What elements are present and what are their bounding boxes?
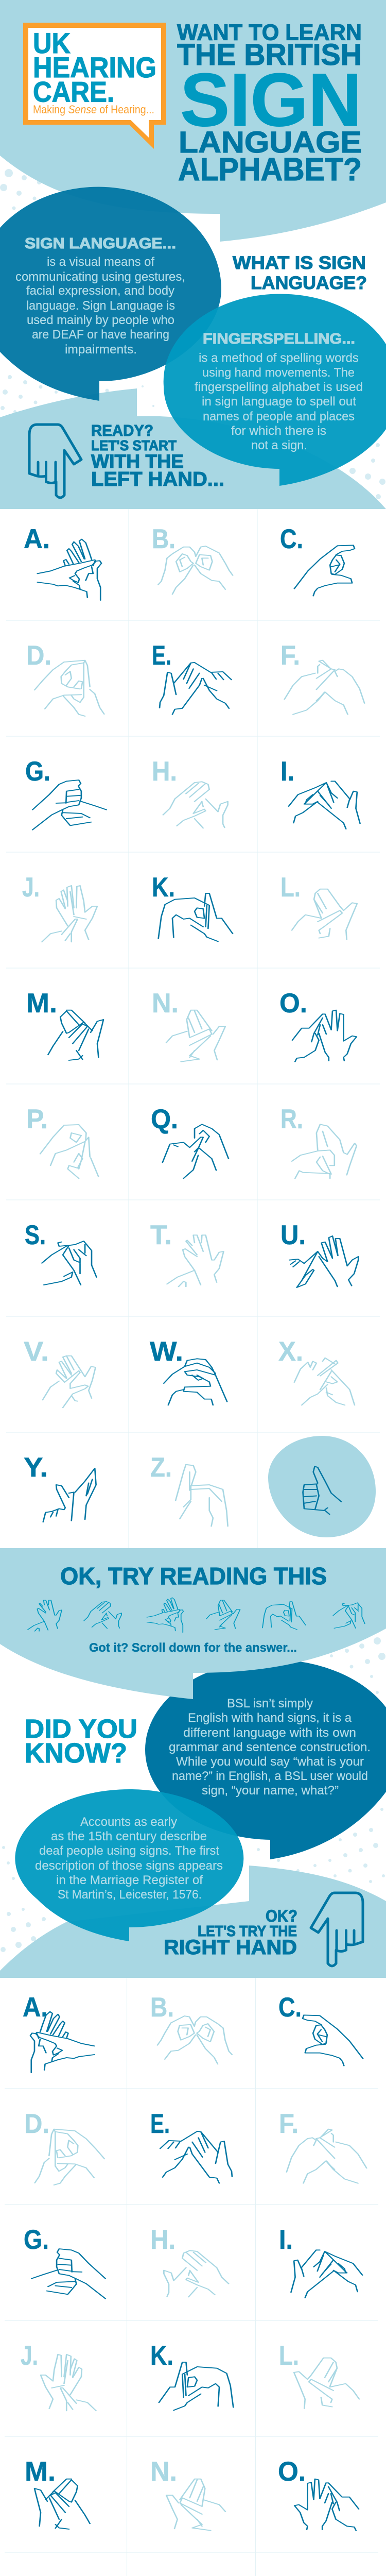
- dark bubble: BSL isn't simply: grammar and sentence construction.: [169, 1740, 371, 1754]
- left cell B: [152, 524, 233, 594]
- right cell A: A.: [23, 1992, 48, 2023]
- left cell Z: [150, 1452, 228, 1526]
- right cell B: B.: [150, 1992, 174, 2023]
- right cell N: N.: [150, 2456, 177, 2487]
- bubble: accounts: in the Marriage Register of: [56, 1873, 203, 1887]
- right cell D: D.: [24, 2109, 49, 2139]
- dark bubble: BSL isn't simply: [145, 1659, 386, 1859]
- heading: ok try reading this: OK, TRY READING THIS: [60, 1563, 327, 1589]
- heading: did you know: [25, 1714, 137, 1769]
- left cell V: [24, 1336, 96, 1408]
- left cell U: U.: [280, 1220, 306, 1250]
- logo: UK Hearing Care: UK: [33, 27, 71, 59]
- dark bubble: BSL isn't simply: English with hand signs, it is a: [188, 1711, 352, 1725]
- bubble: accounts: Accounts as early: [80, 1815, 177, 1829]
- left cell J: [22, 872, 97, 942]
- left cell D: [26, 640, 104, 716]
- logo: UK Hearing Care: [23, 23, 166, 149]
- left cell P: [26, 1104, 98, 1178]
- dark bubble: BSL isn't simply: While you would say “what is your: [176, 1755, 364, 1769]
- icon: H: [84, 1602, 121, 1629]
- title: WANT TO LEARN: [177, 20, 362, 45]
- title: THE BRITISH: [177, 38, 362, 72]
- title: ALPHABET?: [178, 152, 362, 188]
- left cell G: G.: [25, 756, 50, 787]
- left cell R: [280, 1104, 357, 1178]
- right cell K: K.: [150, 2341, 173, 2371]
- right cell N: [150, 2456, 225, 2531]
- text: ready: READY?: [91, 421, 153, 439]
- left cell Y: [24, 1452, 96, 1522]
- left thumbs up: [268, 1436, 376, 1537]
- left cell C: C.: [280, 524, 303, 554]
- left cell T: T.: [150, 1220, 172, 1250]
- bubble: fingerspelling: [164, 294, 386, 486]
- bubble: accounts: description of those signs appears: [35, 1859, 223, 1873]
- left cell D: D.: [26, 640, 51, 671]
- header bubble: [0, 0, 386, 242]
- right cell L: [279, 2341, 359, 2409]
- text: ok try the right hand: [164, 1907, 297, 1959]
- left cell I: [280, 756, 360, 829]
- text: ready: LET'S START: [91, 437, 177, 453]
- right cell F: F.: [279, 2109, 299, 2139]
- bubble: sign language: communicating using gestures,: [15, 270, 185, 284]
- left cell M: [26, 988, 103, 1060]
- left cell Q: [151, 1104, 229, 1178]
- right cell D: [24, 2109, 104, 2185]
- left cell F: [280, 640, 364, 715]
- heading: what is sign language: LANGUAGE?: [251, 273, 367, 293]
- text: ready: [91, 421, 224, 490]
- left cell S: S.: [25, 1220, 46, 1250]
- icon: pointing hand left: [29, 425, 81, 498]
- left cell A: [24, 524, 101, 600]
- dark bubble: BSL isn't simply: sign, “your name, what?”: [202, 1784, 339, 1798]
- dark bubble: BSL isn't simply: BSL isn’t simply: [227, 1697, 313, 1710]
- left cell Q: Q.: [151, 1104, 178, 1134]
- left cell K: K.: [152, 872, 175, 903]
- icon: pointing hand right: [311, 1893, 363, 1966]
- left cell T: [150, 1220, 223, 1286]
- bubble: accounts: as the 15th century describe: [51, 1829, 207, 1843]
- left cell L: L.: [280, 872, 301, 903]
- reading band bubble: [0, 1548, 386, 1699]
- heading: did you know: DID YOU: [25, 1714, 137, 1743]
- left cell U: [280, 1220, 358, 1287]
- text: ok try the right hand: LET'S TRY THE: [198, 1923, 297, 1940]
- left cell O: O.: [279, 988, 307, 1019]
- right cell G: [24, 2225, 106, 2299]
- left cell K: [152, 872, 233, 941]
- bubble: sign language: facial expression, and body: [26, 284, 174, 298]
- reading hands: [28, 1598, 365, 1632]
- title: SIGN: [180, 58, 362, 142]
- left cell I: I.: [280, 756, 294, 787]
- left cell W: W.: [150, 1336, 183, 1367]
- heading: did you know: KNOW?: [25, 1738, 127, 1769]
- bubble: sign language: impairments.: [65, 343, 137, 357]
- left cell V: V.: [24, 1336, 49, 1367]
- text: ok try the right hand: RIGHT HAND: [164, 1936, 297, 1959]
- left cell Y: Y.: [24, 1452, 48, 1483]
- bubble: sign language: language. Sign Language is: [26, 299, 175, 313]
- bubble: fingerspelling: for which there is: [231, 424, 326, 438]
- right cell M: [25, 2456, 90, 2529]
- dark bubble: BSL isn't simply: different language with its own: [183, 1726, 356, 1740]
- left cell X: [278, 1336, 355, 1405]
- left cell F: F.: [280, 640, 300, 671]
- right cell F: [279, 2109, 366, 2183]
- logo: UK Hearing Care: HEARING: [33, 51, 156, 83]
- left cell M: M.: [26, 988, 57, 1019]
- left cell S: [25, 1220, 97, 1285]
- left cell H: [152, 756, 228, 828]
- right cell K: [150, 2341, 233, 2410]
- bubble: fingerspelling: names of people and places: [203, 410, 355, 423]
- left cell E: E.: [152, 640, 171, 671]
- right cell B: [150, 1992, 232, 2064]
- bubble: fingerspelling: fingerspelling alphabet is used: [195, 380, 363, 394]
- heading: what is sign language: WHAT IS SIGN: [233, 253, 366, 273]
- bubble: sign language: [0, 187, 221, 401]
- right cell L: L.: [279, 2341, 299, 2371]
- icon: T: [28, 1600, 62, 1631]
- bubble: accounts: St Martin’s, Leicester, 1576.: [58, 1888, 202, 1902]
- left cell E: [152, 640, 232, 715]
- left cell N: N.: [152, 988, 179, 1019]
- dark bubble: BSL isn't simply: name?” in English, a BSL user would: [172, 1769, 368, 1783]
- bubble: fingerspelling: in sign language to spell out: [202, 395, 356, 409]
- right cell J: J.: [21, 2341, 38, 2371]
- left cell N: [152, 988, 225, 1062]
- left cell W: [150, 1336, 227, 1405]
- bubble: sign language: are DEAF or have hearing: [32, 328, 169, 342]
- right hand grid lines: [5, 1978, 378, 2576]
- right cell I: [279, 2225, 362, 2298]
- bubble: sign language: used mainly by people who: [27, 313, 174, 327]
- left hand grid lines: [6, 509, 380, 1548]
- left cell X: X.: [278, 1336, 303, 1367]
- left cell C: [280, 524, 355, 596]
- left cell O: [279, 988, 357, 1062]
- right cell G: G.: [24, 2225, 49, 2255]
- icon: S: [333, 1603, 365, 1628]
- left cell L: [280, 872, 357, 940]
- right cell C: [278, 1992, 363, 2066]
- bubble: accounts: [15, 1789, 243, 1941]
- right cell O: O.: [278, 2456, 306, 2487]
- bubble: fingerspelling: FINGERSPELLING...: [203, 331, 355, 347]
- right cell O: [278, 2456, 359, 2531]
- bubble: sign language: SIGN LANGUAGE...: [25, 235, 176, 252]
- right cell J: [21, 2341, 96, 2411]
- left cell J: J.: [22, 872, 40, 903]
- right cell C: C.: [278, 1992, 302, 2023]
- left cell R: R.: [280, 1104, 303, 1134]
- title: LANGUAGE: [179, 126, 362, 159]
- bubble: accounts: deaf people using signs. The first: [39, 1844, 219, 1858]
- right cell A: [23, 1992, 94, 2073]
- heading: what is sign language: [233, 253, 367, 293]
- right cell I: I.: [279, 2225, 293, 2255]
- right cell E: [150, 2109, 232, 2183]
- left cell B: B.: [152, 524, 176, 554]
- left cell A: A.: [24, 524, 50, 554]
- left cell G: [25, 756, 107, 830]
- bubble: fingerspelling: not a sign.: [251, 438, 307, 452]
- left cell Z: Z.: [150, 1452, 172, 1483]
- logo: UK Hearing Care: CARE.: [33, 75, 114, 108]
- right cell H: H.: [150, 2225, 176, 2255]
- right cell M: M.: [25, 2456, 56, 2487]
- icon: N: [206, 1600, 240, 1630]
- right cell E: E.: [150, 2109, 170, 2139]
- right hand bubble: [0, 1866, 386, 1978]
- text: ready: LEFT HAND...: [91, 468, 224, 490]
- text: ready: WITH THE: [91, 450, 184, 472]
- icon: K: [262, 1602, 306, 1630]
- left cell P: P.: [26, 1104, 48, 1134]
- right cell H: [150, 2225, 229, 2297]
- text: scroll down: Got it? Scroll down for the answer...: [89, 1641, 297, 1655]
- bubble: fingerspelling: using hand movements. The: [202, 366, 355, 380]
- left cell H: H.: [152, 756, 177, 787]
- text: ok try the right hand: OK?: [266, 1907, 297, 1925]
- bubble: fingerspelling: is a method of spelling words: [199, 351, 359, 365]
- ready bubble: [0, 388, 386, 509]
- title: [177, 20, 362, 188]
- logo: UK Hearing Care: Making Sense of Hearing...: [33, 103, 154, 116]
- icon: A: [147, 1598, 183, 1632]
- bubble: sign language: is a visual means of: [47, 255, 154, 269]
